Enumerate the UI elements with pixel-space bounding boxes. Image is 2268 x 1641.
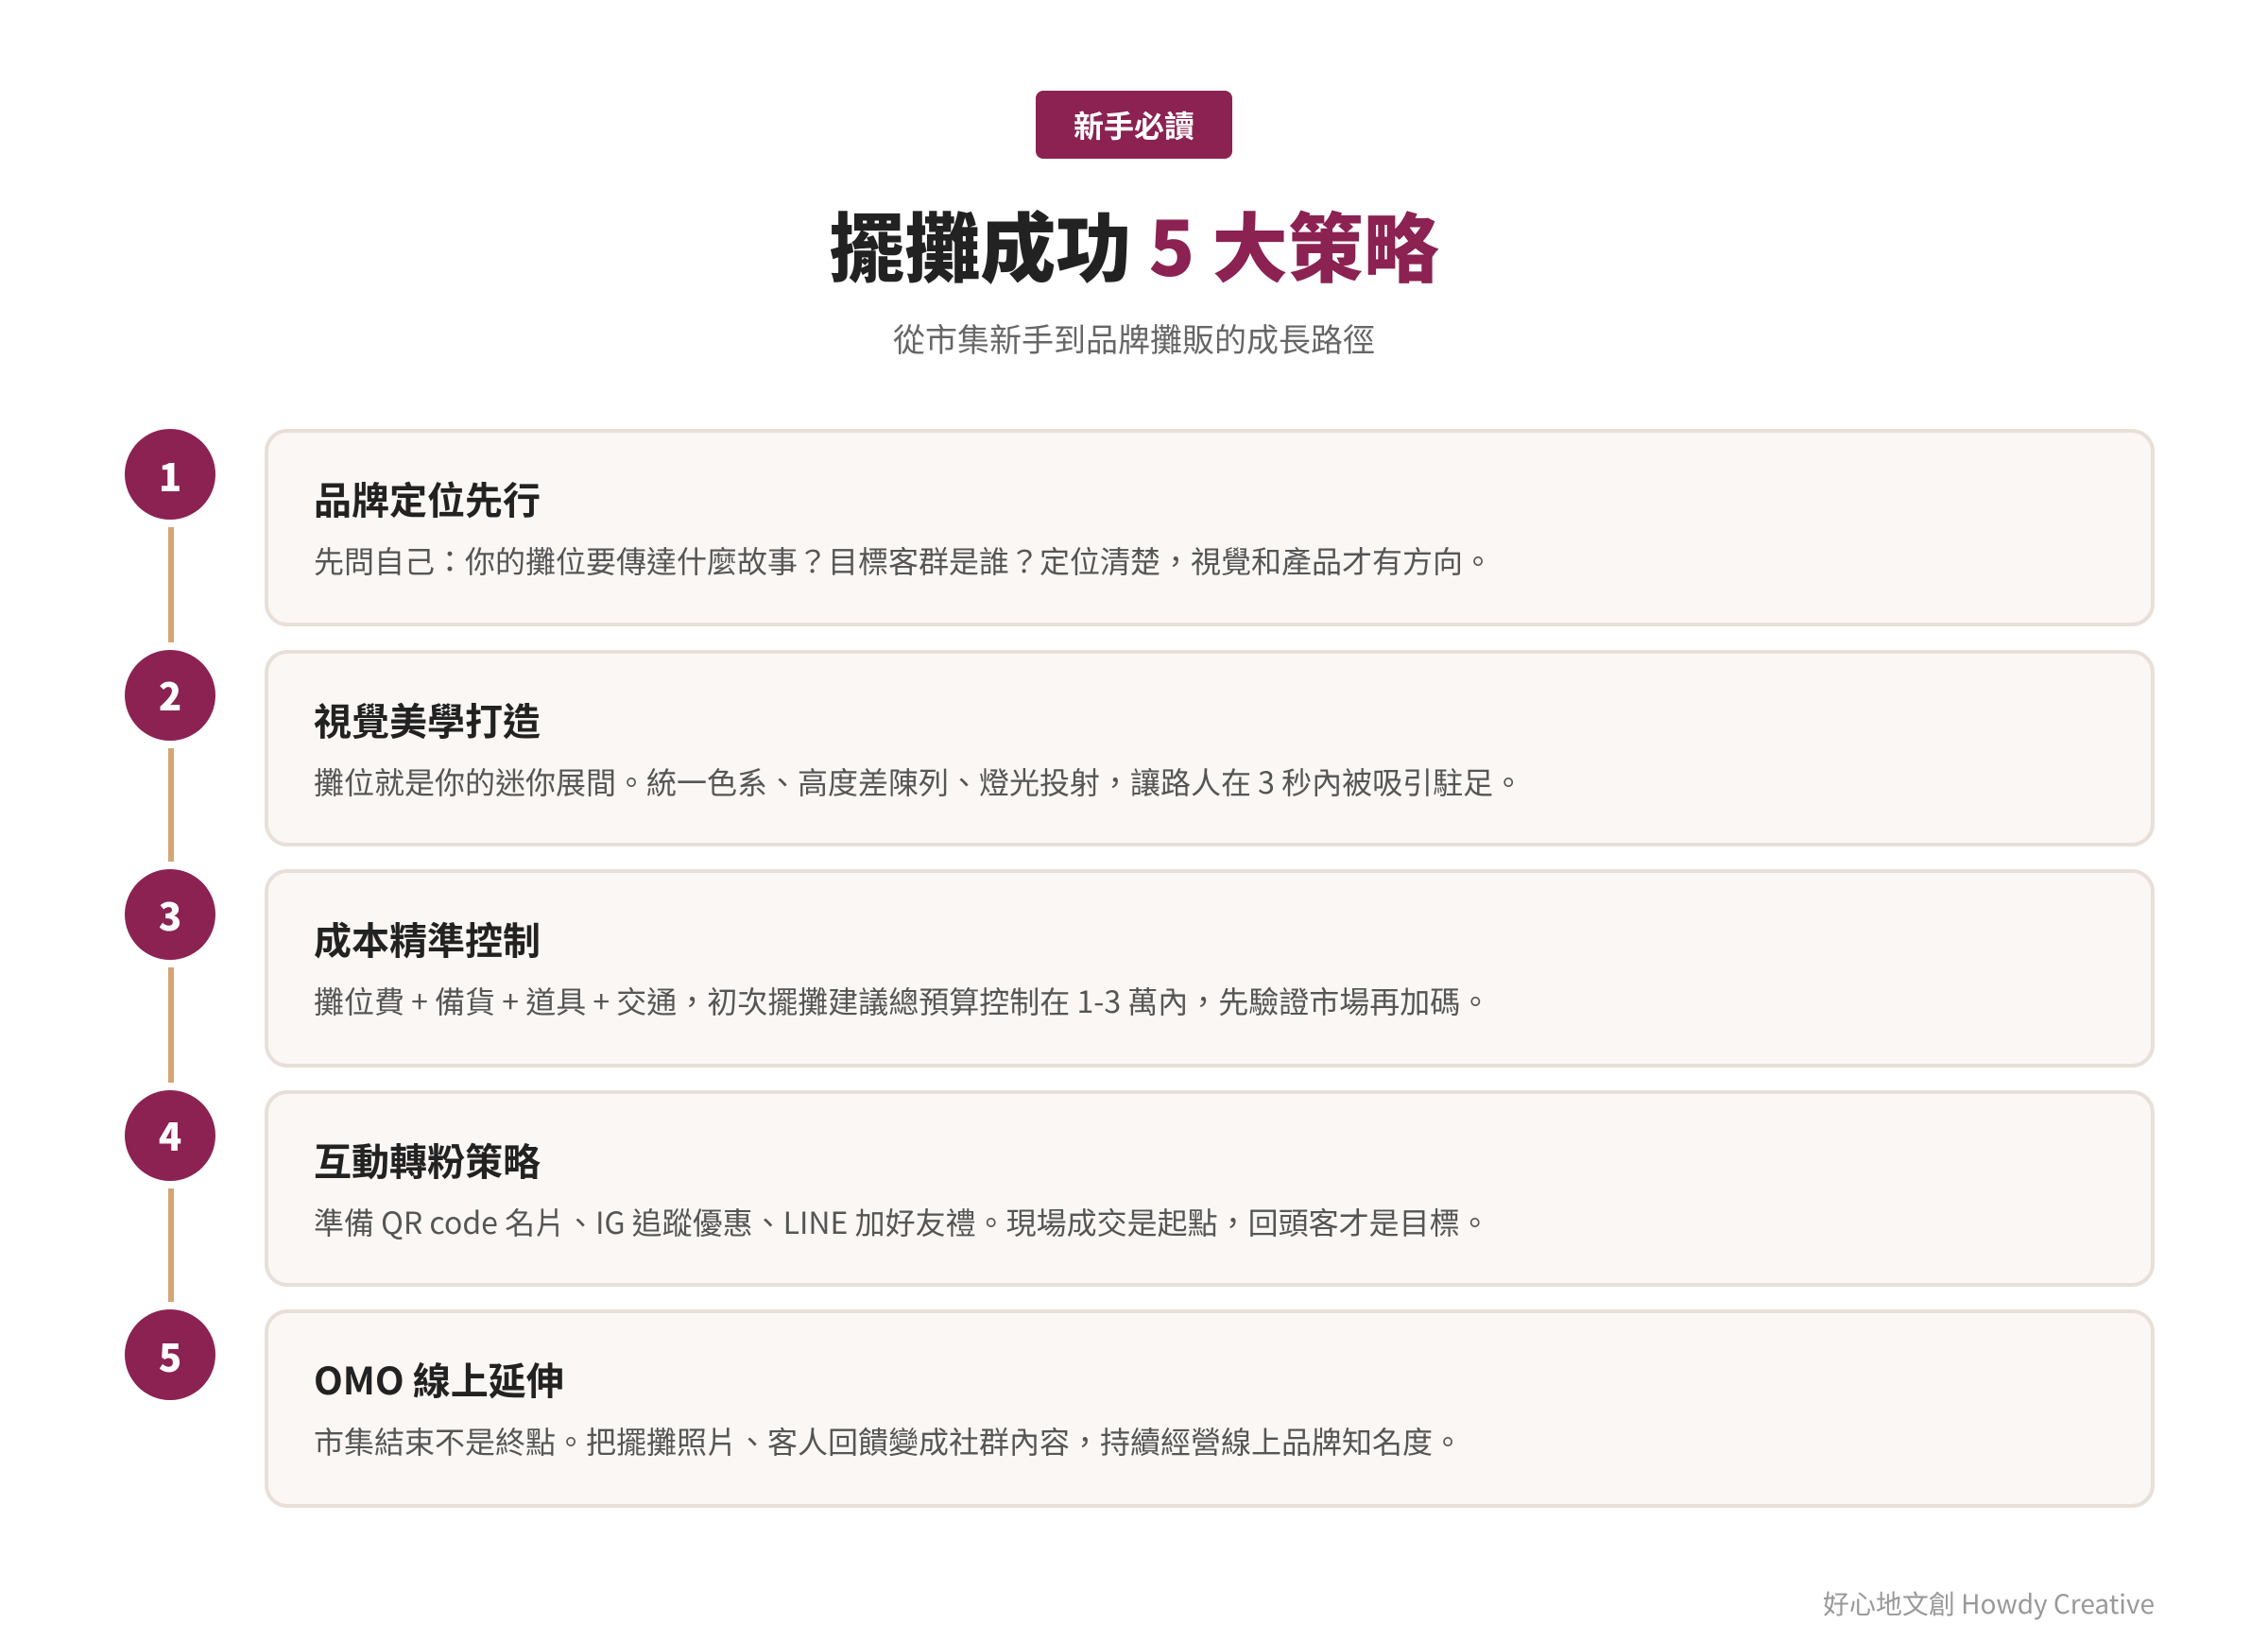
- connector 2: [168, 748, 174, 862]
- step 5 number: 5: [159, 1328, 181, 1383]
- panel: step 3 card: [265, 869, 2155, 1068]
- panel: step 2 card: [265, 650, 2155, 846]
- step 2 description: 攤位就是你的迷你展間。統一色系、高度差陳列、燈光投射，讓路人在 3 秒內被吸引駐足。: [314, 760, 1523, 803]
- step 3 number: 3: [159, 887, 181, 942]
- step 2 number: [125, 650, 215, 741]
- badge: [1036, 91, 1232, 159]
- panel: step 5 card: [265, 1309, 2155, 1508]
- step 4 description: 準備 QR code 名片、IG 追蹤優惠、LINE 加好友禮。現場成交是起點，回頭客才是目標。: [314, 1200, 1490, 1243]
- step 4 number: [125, 1090, 215, 1181]
- step 5 description: 市集結束不是終點。把擺攤照片、客人回饋變成社群內容，持續經營線上品牌知名度。: [314, 1419, 1463, 1462]
- connector 1: [168, 527, 174, 642]
- subtitle: 從市集新手到品牌攤販的成長路徑: [893, 315, 1375, 361]
- step 3 description: 攤位費 + 備貨 + 道具 + 交通，初次擺攤建議總預算控制在 1-3 萬內，先驗證市場再加碼。: [314, 979, 1490, 1022]
- step 1 description: 先問自己：你的攤位要傳達什麼故事？目標客群是誰？定位清楚，視覺和產品才有方向。: [314, 538, 1493, 582]
- step 2 heading: 視覺美學打造: [314, 692, 541, 746]
- step 3 number: [125, 869, 215, 960]
- title: 擺攤成功 5 大策略: [829, 189, 1439, 299]
- step 5 number: [125, 1309, 215, 1400]
- step 3 heading: 成本精準控制: [314, 911, 541, 966]
- panel: step 4 card: [265, 1090, 2155, 1287]
- step 1 number: 1: [159, 448, 181, 503]
- panel: step 1 card: [265, 429, 2155, 626]
- connector 3: [168, 967, 174, 1083]
- step 1 number: [125, 429, 215, 520]
- step 4 heading: 互動轉粉策略: [314, 1132, 541, 1187]
- connector 4: [168, 1188, 174, 1302]
- footer credit: 好心地文創 Howdy Creative: [1823, 1584, 2155, 1622]
- badge: 新手必讀: [1074, 103, 1194, 146]
- step 4 number: 4: [159, 1107, 181, 1162]
- step 1 heading: 品牌定位先行: [314, 470, 541, 525]
- step 5 heading: OMO 線上延伸: [314, 1351, 564, 1406]
- step 2 number: 2: [159, 667, 181, 722]
